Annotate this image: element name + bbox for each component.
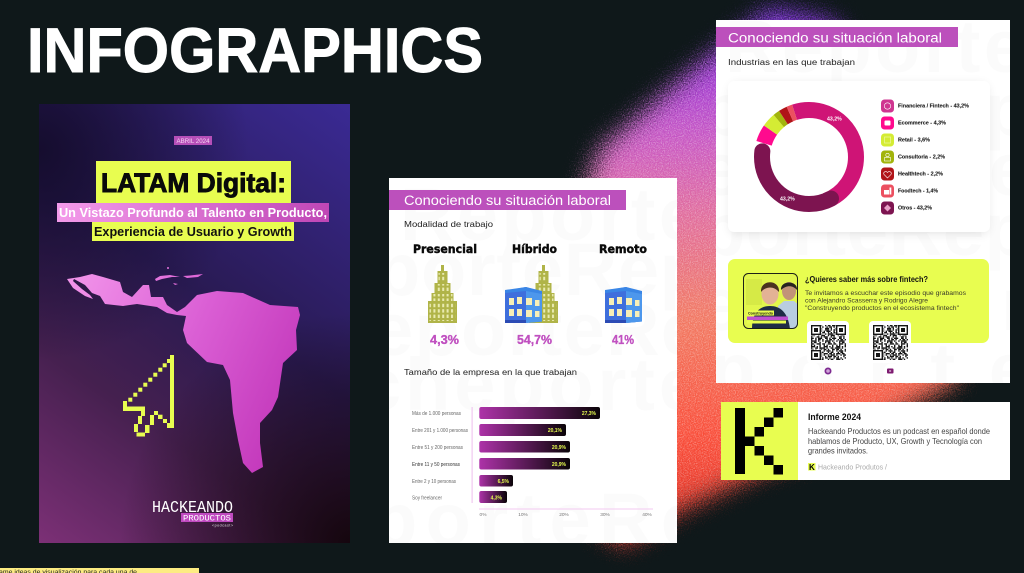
- bar chart: company size: 4,3%: [491, 496, 503, 502]
- date tag: [174, 136, 212, 145]
- logo: Hackeando Productos: HACKEANDO: [152, 499, 233, 518]
- callout: fintech episode: [728, 259, 989, 374]
- panel: report cover: [39, 104, 350, 543]
- bar chart: company size: 20,9%: [552, 462, 567, 468]
- bar chart: company size: 10%: [518, 512, 529, 518]
- panel: industries: porte: [710, 328, 1024, 411]
- legend: Healthtech - 2,2%: [898, 172, 943, 178]
- header bar: [389, 190, 626, 210]
- donut chart: [762, 110, 856, 204]
- cover title: [57, 161, 329, 241]
- logo: Hackeando Productos: <podcast>: [212, 524, 233, 528]
- modality: remoto: [599, 242, 647, 347]
- bar chart: company size: 30%: [600, 512, 611, 518]
- bar chart: company size: Entre 51 y 200 personas: [412, 445, 463, 451]
- panel: work modality and company size: [389, 178, 677, 543]
- modality: hibrido: Híbrido: [512, 242, 557, 256]
- card text: Informe 2024: [808, 412, 862, 422]
- panel: industries: porteRep: [700, 68, 1024, 151]
- card text: hablamos de Producto, UX, Growth y Tecnología con: [808, 436, 982, 446]
- panel: work modality and company size: Reporte: [400, 173, 700, 256]
- card source: Hackeando Produtos /: [818, 462, 888, 472]
- callout text: con Alejandro Scasserra y Rodrigo Alegre: [805, 298, 928, 304]
- card source: K: [809, 463, 815, 472]
- legend: Financiera / Fintech - 43,2%: [898, 104, 969, 110]
- bar chart: company size: 0%: [480, 512, 487, 518]
- legend: [881, 100, 969, 214]
- modality: hibrido: 54,7%: [517, 332, 552, 347]
- modality: presencial: 4,3%: [430, 332, 459, 347]
- bar chart: company size: 20,1%: [548, 428, 563, 434]
- panel: industries: porteRep: [700, 188, 1024, 271]
- callout text: Te invitamos a escuchar este episodio que grabamos: [805, 290, 967, 297]
- bar chart: company size: [412, 407, 653, 518]
- modality: presencial: Presencial: [413, 242, 477, 256]
- bar chart: company size: 27,3%: [582, 411, 597, 417]
- panel: industries: eporteRe: [700, 128, 1024, 211]
- date tag: ABRIL 2024: [176, 139, 210, 145]
- card text: grandes invitados.: [808, 446, 868, 456]
- bar chart: company size: Entre 201 y 1.000 personas: [412, 428, 468, 434]
- donut values: 43,2%: [827, 116, 842, 122]
- icon: pixel cursor: [123, 355, 174, 436]
- modality: remoto: 41%: [612, 332, 634, 347]
- callout text: ¿Quieres saber más sobre fintech?: [805, 275, 928, 284]
- legend: Foodtech - 1,4%: [898, 189, 938, 195]
- logo: Hackeando Productos: [152, 499, 233, 528]
- donut values: 43,2%: [780, 196, 795, 202]
- legend: Ecommerce - 4,3%: [898, 121, 946, 127]
- logo: Hackeando Productos: PRODUCTOS: [183, 514, 231, 524]
- panel: work modality and company size: cheporte: [360, 343, 700, 426]
- card text: Hackeando Productos es un podcast en español donde: [808, 426, 990, 436]
- cover title: Experiencia de Usuario y Growth: [94, 225, 292, 239]
- icon: pixel K logo: [735, 408, 783, 474]
- callout text: "Construyendo productos en el ecosistema fintech": [805, 305, 960, 312]
- bar chart: company size: 20%: [559, 512, 570, 518]
- header bar: [716, 27, 958, 47]
- title: INFOGRAPHICS: [27, 16, 483, 86]
- legend: Otros - 43,2%: [898, 206, 932, 212]
- modality: hibrido: [505, 242, 558, 347]
- bar chart: company size: 20,9%: [552, 445, 567, 451]
- legend: Consultoria - 2,2%: [898, 155, 945, 161]
- bar chart: company size: Entre 2 y 10 personas: [412, 479, 456, 485]
- panel: industries: eRepor: [700, 263, 1024, 346]
- map: Latin America: [67, 267, 300, 473]
- donut values: [780, 116, 842, 202]
- cover title: LATAM Digital:: [101, 168, 286, 198]
- QR code: podcast: [807, 321, 849, 363]
- header bar: Conociendo su situación laboral: [404, 193, 611, 208]
- cover title: Un Vistazo Profundo al Talento en Producto,: [59, 206, 327, 220]
- modality: remoto: Remoto: [599, 242, 647, 256]
- icon: podcast: [824, 368, 832, 374]
- legend: Retail - 3,6%: [898, 138, 930, 144]
- heading: company size: Tamaño de la empresa en la que trabajan: [404, 368, 577, 377]
- panel: report link card: [721, 402, 1010, 480]
- QR code: video: [869, 321, 911, 363]
- icon: video: [887, 368, 894, 374]
- heading: work modality: Modalidad de trabajo: [404, 220, 494, 229]
- episode thumbnail: Construyendo: [748, 312, 774, 316]
- callout text: [805, 275, 967, 312]
- panel: work modality and company size: eporteRe: [372, 288, 702, 371]
- heading: industries: Industrias en las que trabajan: [728, 58, 855, 67]
- header bar: Conociendo su situación laboral: [728, 30, 942, 46]
- panel: work modality and company size: porteRep: [375, 228, 705, 311]
- episode thumbnail: [743, 273, 800, 329]
- bar chart: company size: Soy freelancer: [412, 496, 442, 502]
- card text: [808, 412, 990, 456]
- bar chart: company size: 40%: [642, 512, 653, 518]
- bar chart: company size: Entre 11 y 50 personas: [412, 462, 460, 468]
- bar chart: company size: Más de 1.000 personas: [412, 411, 461, 417]
- panel: work modality and company size: porteRe: [372, 478, 702, 561]
- highlighted text fragment: [0, 568, 199, 573]
- panel: industries: Reporte: [725, 5, 1024, 88]
- gradient glow behind panels: [585, 8, 960, 545]
- modality: presencial: [413, 242, 477, 347]
- panel: industries: [716, 20, 1010, 383]
- bar chart: company size: 6,5%: [498, 479, 510, 485]
- card: donut chart and legend: [728, 81, 990, 234]
